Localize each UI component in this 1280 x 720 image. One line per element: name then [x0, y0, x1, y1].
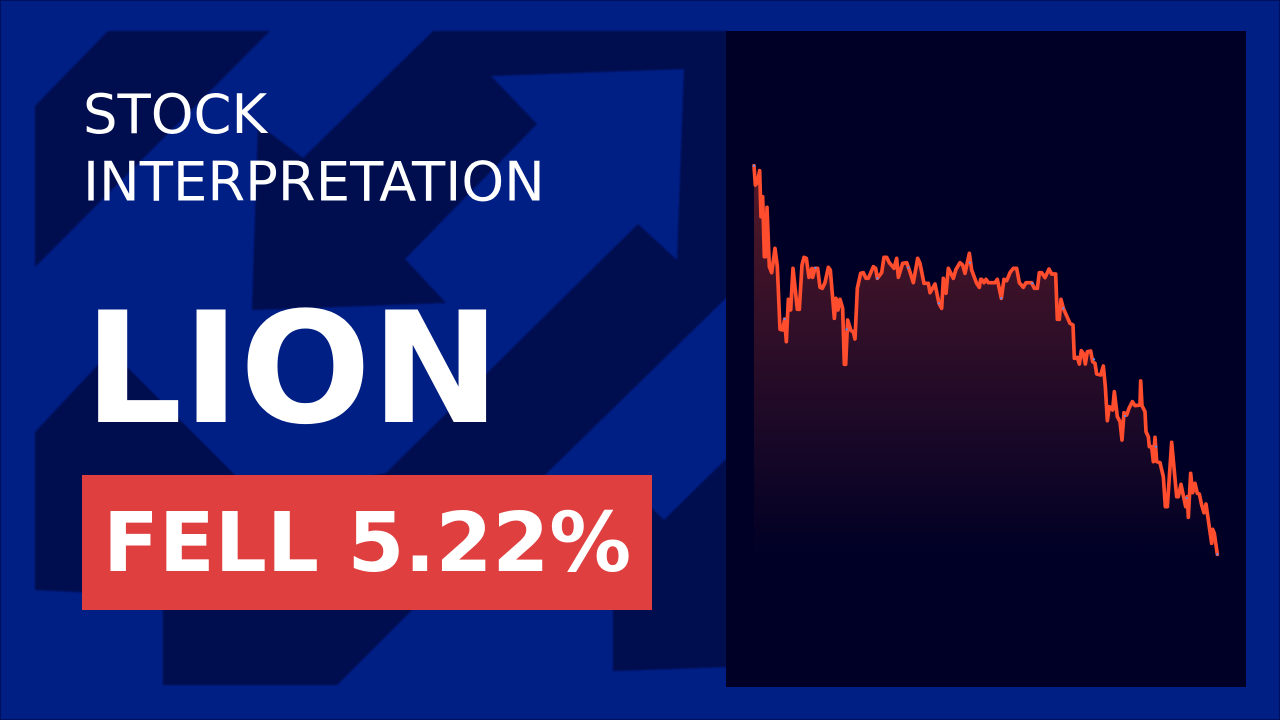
title: INTERPRETATION: [83, 150, 545, 214]
badge: change: FELL 5.22%: [103, 496, 631, 591]
data markers: [753, 164, 1218, 555]
area fill: [754, 166, 1217, 554]
ticker: LION: [84, 280, 500, 459]
title: STOCK: [83, 83, 269, 146]
background arrows: [35, 31, 727, 685]
panel: chart: [726, 31, 1246, 687]
badge: change: [82, 475, 652, 610]
price line: [754, 166, 1217, 554]
